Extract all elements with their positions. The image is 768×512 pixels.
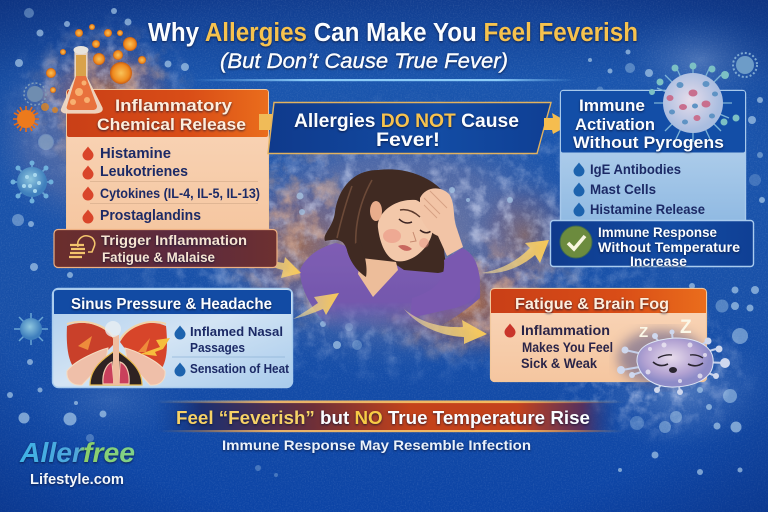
arrow: chemical release to banner: [259, 114, 275, 130]
panel header: Without Pyrogens: [573, 133, 724, 152]
banner: allergies do not cause fever: Fever!: [376, 130, 440, 151]
list: chemicals: Prostaglandins: [100, 208, 201, 224]
icon: orange virus: [13, 106, 39, 132]
list: sinus symptoms: [172, 324, 290, 376]
panel: immune activation: [560, 90, 746, 224]
list: chemicals: [82, 146, 260, 224]
arrow: woman to fatigue: [404, 309, 487, 344]
list: immune items: Mast Cells: [590, 182, 656, 197]
list: fatigue text: [504, 323, 613, 371]
banner: allergies do not cause fever: [268, 102, 551, 154]
logo: allerfree lifestyle: Allerfree: [19, 437, 135, 468]
heading: title: Why Allergies Can Make You Feel Feverish: [148, 19, 638, 47]
panel: trigger inflammation footer: Fatigue & Malaise: [102, 249, 215, 265]
icon: small virus top right: [733, 53, 757, 77]
logo: allerfree lifestyle: [19, 437, 135, 488]
panel header: [67, 90, 268, 137]
list: chemicals: Cytokines (IL-4, IL-5, IL-13): [100, 186, 260, 201]
panel: inflammatory chemical release: [66, 90, 268, 234]
banner: allergies do not cause fever: Allergies DO NOT Cause: [294, 111, 519, 132]
logo: allerfree lifestyle: Lifestyle.com: [30, 471, 124, 488]
panel: immune response footer: [550, 220, 754, 269]
list: chemicals: Leukotrienes: [100, 164, 188, 180]
panel: trigger inflammation footer: [54, 230, 277, 268]
icon: sleep letters: Z: [639, 324, 648, 341]
list: sinus symptoms: Passages: [190, 340, 245, 355]
icon: flask: [61, 46, 102, 113]
panel: immune response footer: Immune Response: [598, 225, 717, 240]
heading: subtitle: (But Don’t Cause True Fever): [220, 49, 508, 73]
panel: trigger inflammation footer: Trigger Inflammation: [101, 232, 247, 248]
panel: immune response footer: Increase: [630, 254, 688, 269]
panel: fatigue and brain fog: [490, 288, 706, 386]
panel header: Activation: [575, 115, 655, 134]
list: sinus symptoms: Inflamed Nasal: [190, 324, 283, 339]
woman with headache: [300, 169, 480, 334]
arrow: trigger to woman: [256, 254, 301, 278]
text: immune response note: Immune Response May Resemble Infection: [222, 437, 531, 453]
orange chemical bubbles: [41, 24, 146, 113]
list: fatigue text: Sick & Weak: [521, 356, 597, 371]
icon: large virus: [649, 62, 740, 142]
icon: check badge: [560, 226, 592, 258]
icon: sleepy cell: [617, 330, 730, 395]
list: fatigue text: Makes You Feel: [522, 340, 613, 355]
panel header: Sinus Pressure & Headache: [71, 296, 272, 313]
panel header: Fatigue & Brain Fog: [515, 296, 669, 313]
illustration: sinus anatomy: [67, 321, 170, 385]
arrow: banner to immune activation: [544, 113, 571, 134]
panel header: Chemical Release: [97, 115, 246, 134]
icon: sleep letters: [639, 317, 692, 341]
panel header: [561, 91, 745, 152]
arrow: woman to sinus link: [293, 293, 339, 319]
arrow: woman to immune footer: [481, 240, 549, 273]
list: sinus symptoms: Sensation of Heat: [190, 361, 290, 376]
list: fatigue text: Inflammation: [521, 323, 610, 338]
panel: sinus pressure and headache: [52, 288, 292, 388]
icon: blue virus lower left: [14, 313, 48, 345]
icon: sleep letters: Z: [680, 317, 692, 338]
banner: feverish but no temperature rise: Feel “Feverish” but NO True Temperature Rise: [176, 408, 590, 428]
panel header: [54, 290, 291, 314]
list: chemicals: Histamine: [100, 146, 171, 162]
panel header: Inflammatory: [115, 96, 233, 115]
icon: blue virus left: [10, 160, 54, 204]
panel: immune response footer: Without Temperature: [598, 240, 741, 255]
panel header: Immune: [579, 96, 645, 115]
list: immune items: Histamine Release: [590, 202, 705, 217]
list: immune items: IgE Antibodies: [590, 162, 681, 177]
icon: small blue virus: [24, 83, 53, 149]
panel header: [491, 289, 706, 313]
banner: feverish but no temperature rise: [155, 400, 625, 432]
icon: head with layers: [69, 236, 95, 257]
list: immune items: [574, 162, 705, 217]
